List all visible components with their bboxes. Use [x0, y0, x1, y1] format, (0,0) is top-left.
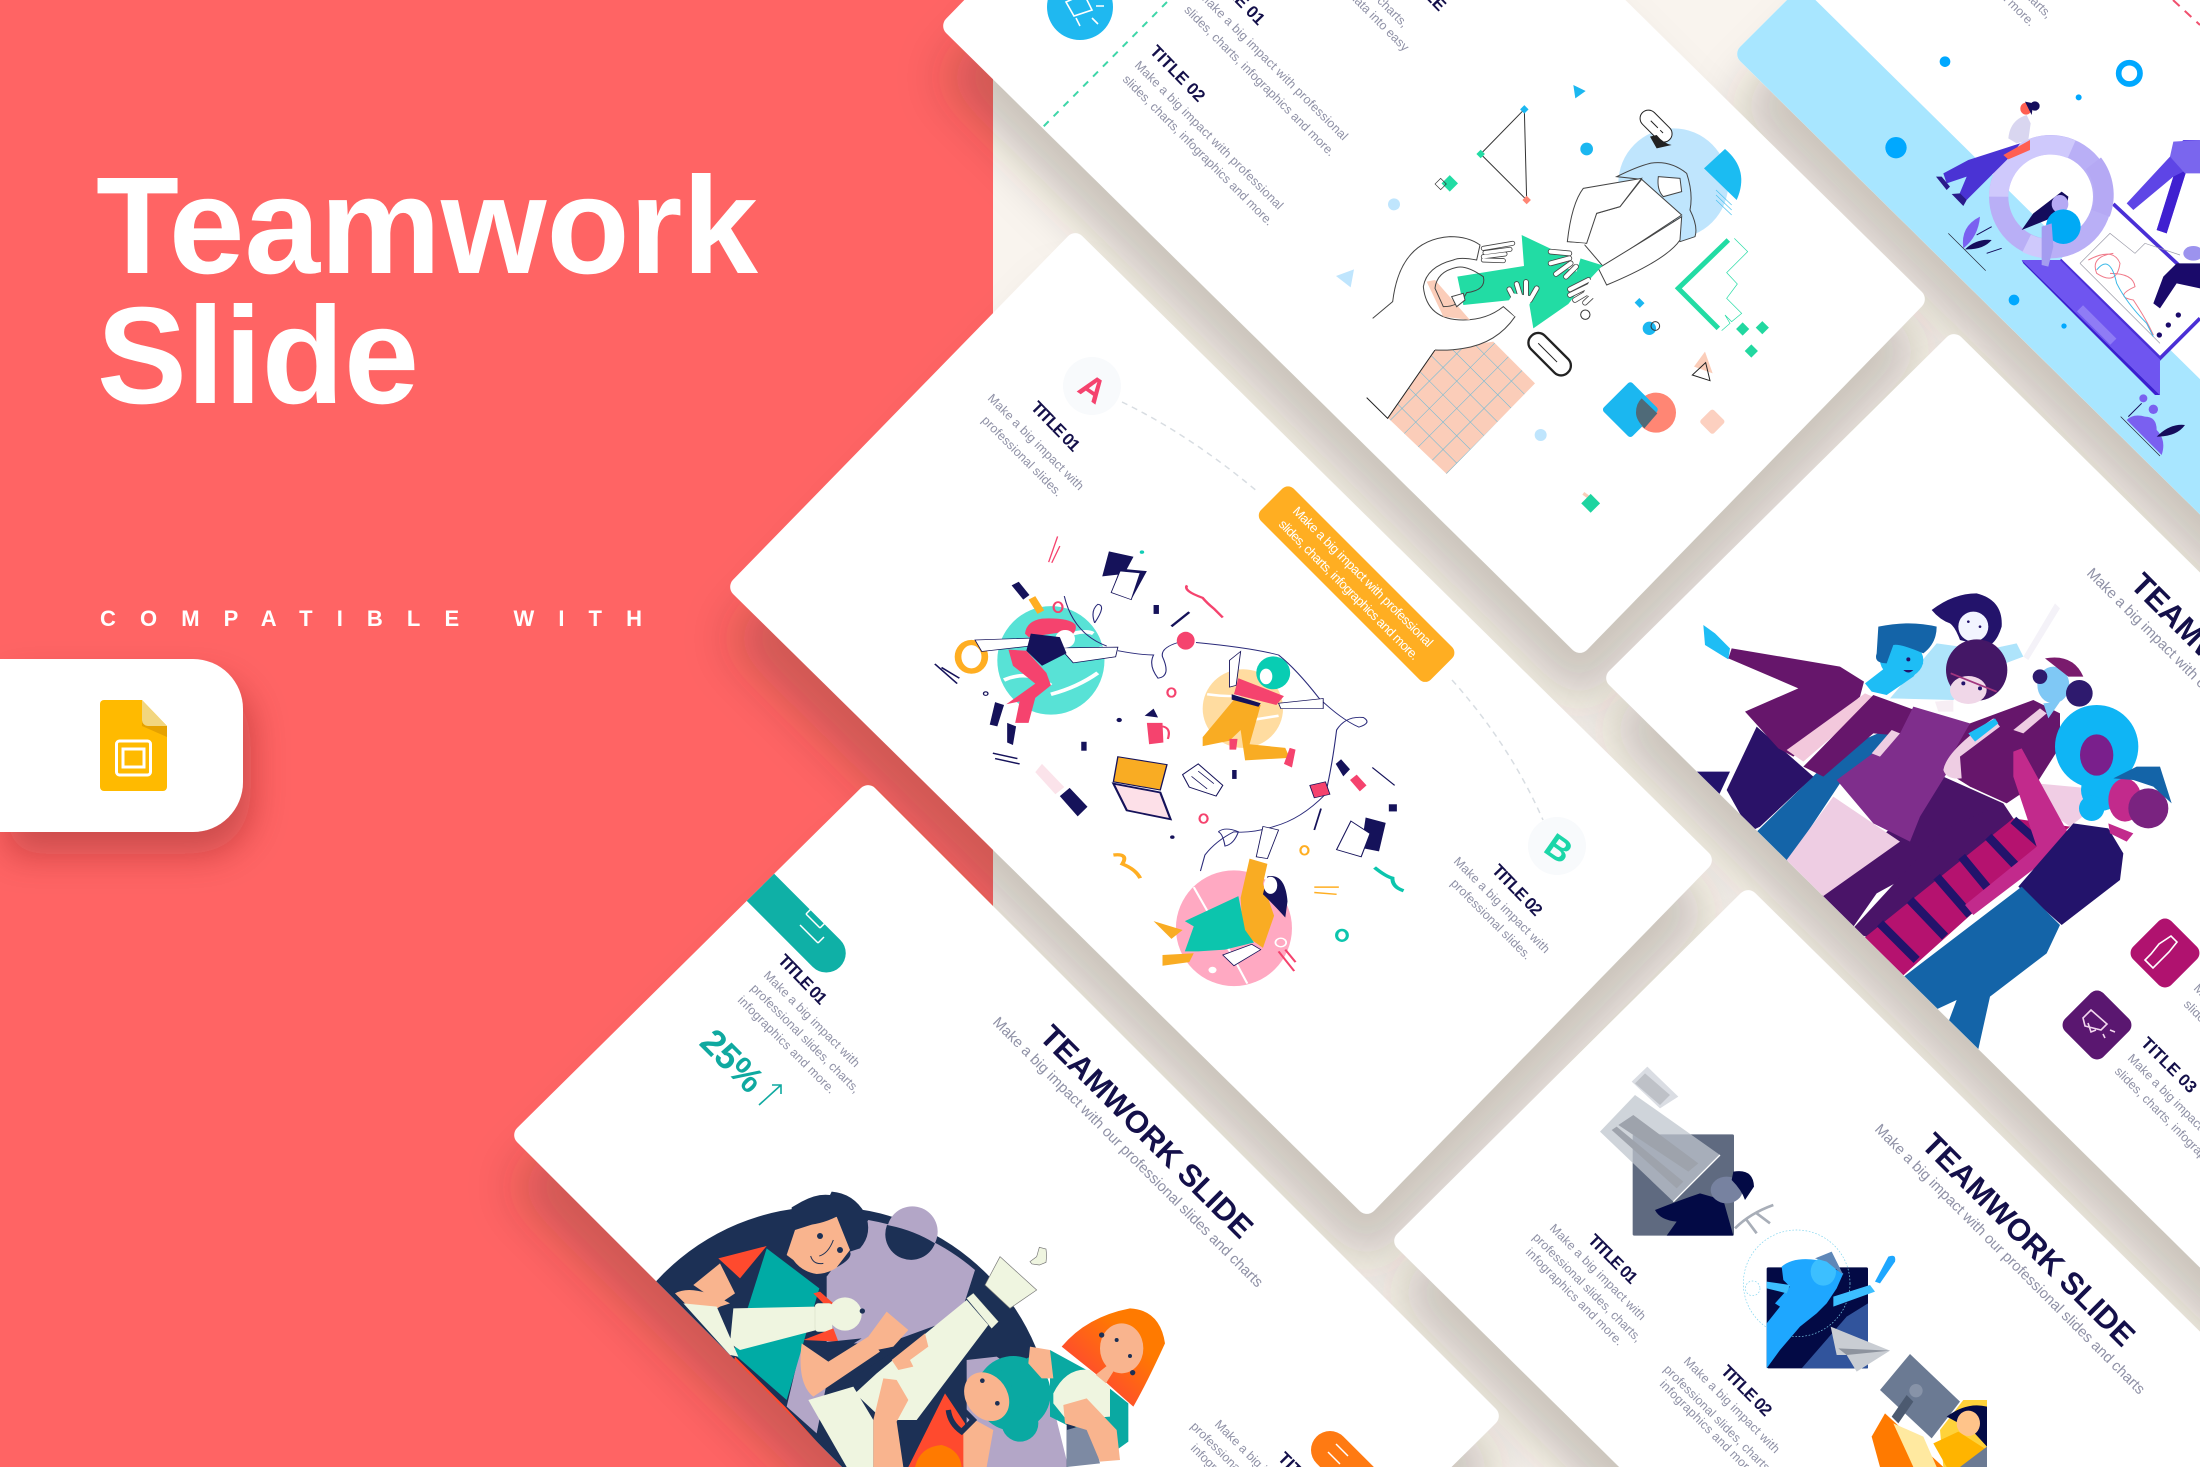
text: title 02: TITLE 02 — [1146, 42, 1209, 106]
slide card — [1602, 330, 2200, 1309]
illustration: floating people — [935, 536, 1404, 986]
stat: 25%: 25% — [692, 1021, 772, 1101]
text: title 01: Make a big impact with — [1547, 1221, 1649, 1323]
panel: bottom right slide — [1390, 886, 2200, 1467]
dashed connector — [1042, 2, 1167, 128]
red panel — [0, 0, 993, 1467]
text: title 03: TITLE 03 — [2137, 1033, 2200, 1097]
teal tab with icon — [747, 874, 854, 980]
icon: megaphone circle — [1047, 0, 1113, 40]
slide card — [1733, 0, 2200, 685]
marker B: B — [1537, 826, 1579, 872]
icon: megaphone tile — [2059, 987, 2135, 1063]
text: title 02: TITLE 02 — [1488, 861, 1546, 920]
main title: Slide — [97, 279, 419, 433]
text: tile caption fragment — [2181, 981, 2200, 1030]
marker A — [1063, 357, 1121, 415]
text: title 02: slides, charts, infographics and more. — [1120, 72, 1276, 228]
compatible with label: COMPATIBLE WITH — [100, 606, 642, 631]
marker B — [1528, 817, 1586, 875]
callout: orange: slides, charts, infographics and more. — [1276, 517, 1422, 663]
text: title 01: infographics and more. — [1523, 1245, 1626, 1348]
text: title 02: Make a big impact with professional — [1132, 58, 1286, 212]
panel: slide top right with laptop — [1733, 0, 2200, 685]
dashed connector B — [1452, 680, 1543, 820]
subtitle: Make a big impact with our professional slides and charts — [1871, 1121, 2148, 1398]
text: title 01: TITLE 01 — [774, 951, 831, 1008]
heading: TEAMWORK SLIDE — [1033, 1018, 1260, 1245]
text: title 02: Make a big impact with — [1451, 854, 1553, 956]
illustration: laptop and team — [1885, 56, 2200, 456]
slide card — [1390, 886, 2200, 1467]
dashed line — [2173, 0, 2200, 25]
text: title 01: slides, charts, infographics and more. — [1182, 3, 1338, 159]
text: title 01: Make a big impact with — [985, 391, 1087, 493]
text: title 01: Make a big impact with — [761, 968, 863, 1070]
arrow: up — [759, 1085, 781, 1105]
dashed connector A — [1122, 402, 1258, 492]
text: lower fragment — [1188, 1417, 1321, 1467]
text: title 02: professional slides. — [1448, 876, 1534, 962]
text: title 01: professional slides, charts, — [1530, 1230, 1644, 1345]
icon: google slides — [100, 700, 167, 791]
badge card — [0, 659, 243, 832]
marker A: A — [1071, 366, 1113, 412]
main title: Teamwork — [96, 149, 758, 303]
callout: orange — [1255, 483, 1458, 685]
slide card — [726, 229, 1716, 1218]
main title — [96, 149, 758, 433]
text: title 02: TITLE 02 — [1717, 1361, 1776, 1420]
panel: chess slide — [510, 781, 1503, 1467]
text: title 01: professional slides. — [979, 413, 1065, 499]
text: title 01: TITLE 01 — [1027, 398, 1084, 455]
blue band — [1733, 0, 2200, 685]
illustration: chess team — [656, 1192, 1165, 1467]
slide card — [939, 0, 1929, 657]
slide card — [510, 781, 1503, 1467]
text: title 01: infographics and more. — [735, 993, 838, 1096]
illustration: group of six people — [1690, 593, 2172, 1057]
panel: slide with star illustration — [939, 0, 1929, 657]
illustration: document and people — [1600, 1067, 1987, 1467]
text: third column fragment — [1347, 0, 1450, 55]
panel: floating people slide — [726, 229, 1716, 1218]
text: title 02: Make a big impact with — [1681, 1354, 1783, 1456]
panel: team purple slide — [1602, 330, 2200, 1309]
subtitle: Make a big impact with our professional slides and charts — [989, 1014, 1266, 1291]
white card — [0, 659, 243, 832]
icon: magenta horse tile — [2127, 915, 2200, 991]
orange tab — [1303, 1423, 1422, 1467]
text: title 01: professional slides, charts, — [748, 981, 862, 1096]
callout: orange: Make a big impact with professional — [1290, 504, 1436, 650]
heading: TEAMWORK SLIDE — [1915, 1126, 2142, 1353]
illustration: star teamwork — [1336, 85, 1769, 513]
text: title 01: TITLE 01 — [1584, 1230, 1641, 1288]
